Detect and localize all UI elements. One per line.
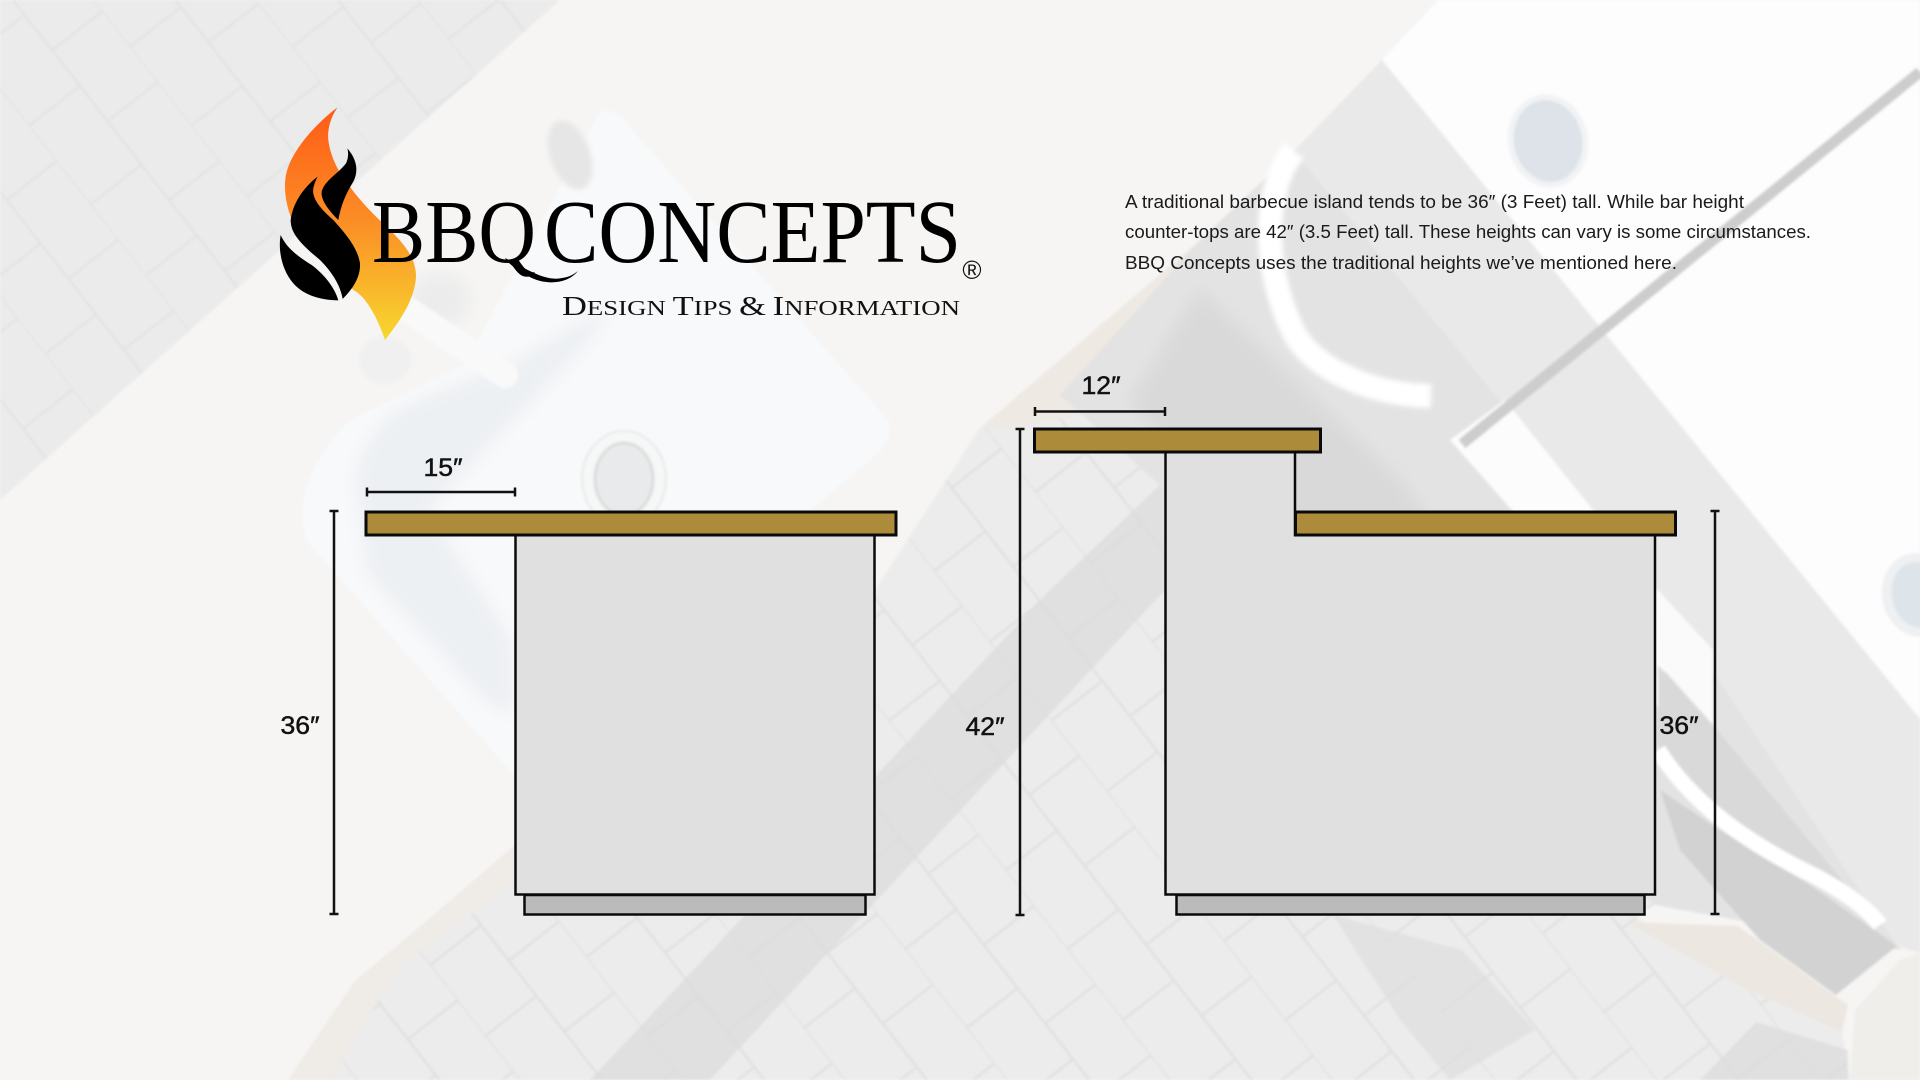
description text: A traditional barbecue island tends to be 36″ (3 Feet) tall. While bar height	[1125, 191, 1744, 212]
height dimension 42 inch	[966, 429, 1024, 915]
lower countertop	[1296, 512, 1676, 535]
icon: flame	[280, 107, 416, 340]
cabinet body	[1166, 452, 1655, 894]
logo: BBQ Concepts	[280, 107, 982, 340]
height dimension 36 inch: 36″	[280, 712, 320, 740]
wordmark: CONCEPTS	[544, 183, 961, 282]
overhang dimension 12 inch	[1035, 372, 1165, 416]
base plinth	[1176, 895, 1644, 914]
height dimension 42 inch: 42″	[966, 713, 1005, 741]
diagram: traditional 36 inch island	[280, 454, 896, 914]
countertop	[366, 512, 896, 535]
overhang dimension 12 inch: 12″	[1082, 372, 1121, 400]
description text	[1125, 191, 1811, 273]
height dimension 36 inch	[280, 511, 338, 914]
base plinth	[524, 895, 866, 914]
bar countertop	[1034, 429, 1320, 452]
registered mark: ®	[962, 255, 982, 285]
wordmark: BBQ	[372, 183, 536, 282]
overhang dimension 15 inch: 15″	[424, 454, 463, 482]
description text: BBQ Concepts uses the traditional heights we’ve mentioned here.	[1125, 252, 1677, 273]
Q swash	[505, 258, 578, 282]
diagram: bar height 42 inch island	[966, 372, 1720, 915]
overhang dimension 15 inch	[367, 454, 515, 496]
cabinet body	[516, 535, 874, 894]
height dimension 36 inch	[1660, 511, 1720, 914]
description text: counter-tops are 42″ (3.5 Feet) tall. These heights can vary is some circumstances.	[1125, 221, 1811, 242]
wordmark	[372, 183, 961, 282]
tagline: D ESIGN TIPS & INFORMATION	[562, 291, 960, 321]
height dimension 36 inch: 36″	[1660, 712, 1699, 740]
